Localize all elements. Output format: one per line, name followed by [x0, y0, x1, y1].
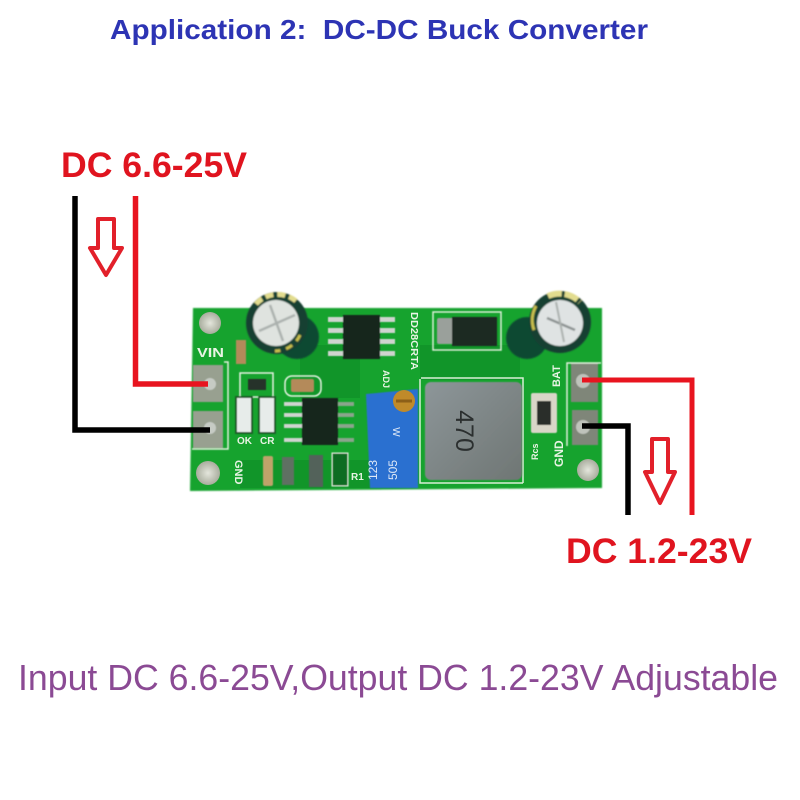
board silkscreen labels: CR: [260, 436, 275, 447]
blue trimmer potentiometer: W: [390, 427, 401, 437]
circuit board: [190, 291, 602, 491]
input capacitor: [246, 292, 319, 359]
board silkscreen labels: VIN: [197, 345, 224, 360]
upper chip: [328, 315, 395, 359]
bottom caption: Input DC 6.6-25V,Output DC 1.2-23V Adjustable: [18, 657, 778, 698]
input wire: ground (black): [75, 196, 210, 430]
board silkscreen labels: OK: [237, 436, 253, 447]
board silkscreen labels: DD28CRTA: [408, 312, 419, 370]
input and output solder pads: [192, 362, 601, 449]
title: Application 2: DC-DC Buck Converter: [110, 14, 648, 45]
board silkscreen labels: GND: [552, 440, 566, 467]
output wire: positive (red): [582, 380, 692, 515]
input wire: positive (red): [136, 196, 208, 384]
output capacitor: [506, 291, 591, 359]
output wire: ground (black): [582, 426, 628, 515]
input voltage label: DC 6.6-25V: [61, 146, 248, 185]
board base: [190, 308, 602, 491]
blue trimmer potentiometer: [366, 389, 418, 488]
arrow: output direction: [645, 439, 675, 503]
small SMD components: [236, 340, 557, 487]
lower chip: [284, 398, 354, 445]
inductor 470: 470: [450, 410, 478, 452]
board silkscreen labels: GND: [232, 460, 244, 484]
blue trimmer potentiometer: 123: [366, 460, 380, 480]
blue trimmer potentiometer: 505: [386, 460, 400, 480]
inductor 470: [420, 378, 523, 483]
board silkscreen labels: [197, 312, 566, 484]
board silkscreen labels: Rcs: [530, 443, 540, 460]
board silkscreen labels: ADJ: [381, 370, 391, 388]
output voltage label: DC 1.2-23V: [566, 532, 753, 571]
board silkscreen labels: R1: [351, 472, 364, 483]
board silkscreen labels: BAT: [551, 365, 563, 387]
mounting holes: [196, 312, 599, 485]
diode: [433, 312, 501, 350]
arrow: input direction: [90, 219, 122, 275]
